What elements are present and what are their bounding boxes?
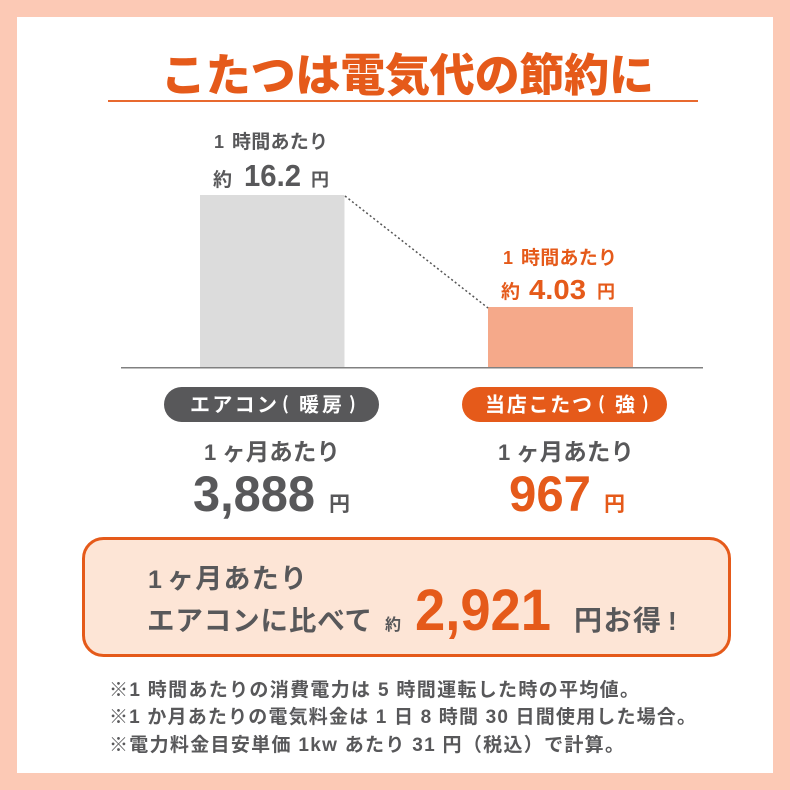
label: air conditioner hourly: 1	[214, 132, 224, 152]
pill label: kotatsu: 当店こたつ	[485, 394, 592, 416]
label: kotatsu hourly	[501, 247, 617, 305]
connector: dotted line between bars	[345, 196, 488, 308]
callout: savings: 2,921	[415, 578, 551, 643]
monthly cost: air conditioner: 3,888	[193, 466, 315, 522]
monthly cost: air conditioner: ヶ月あたり	[222, 439, 340, 465]
axis baseline	[121, 367, 703, 368]
label: air conditioner hourly: 時間あたり	[232, 131, 328, 153]
monthly cost: kotatsu: 1	[498, 440, 510, 465]
callout: savings: !	[668, 606, 677, 636]
monthly cost: kotatsu: ヶ月あたり	[516, 439, 634, 465]
monthly cost: air conditioner: 円	[329, 493, 350, 516]
footnotes	[109, 679, 696, 756]
pill label: kotatsu	[462, 387, 667, 422]
pill label: kotatsu: 強	[615, 394, 635, 416]
callout: savings: 円お得	[574, 605, 661, 636]
monthly cost: kotatsu	[498, 439, 634, 522]
footnotes: ※1 時間あたりの消費電力は 5 時間運転した時の平均値。	[109, 679, 639, 701]
label: air conditioner hourly: 円	[311, 170, 329, 190]
bar: kotatsu	[488, 307, 633, 368]
monthly cost: kotatsu: 円	[604, 493, 625, 516]
label: kotatsu hourly: 約	[501, 281, 520, 303]
label: kotatsu hourly: 1	[503, 248, 513, 268]
footnotes: ※1 か月あたりの電気料金は 1 日 8 時間 30 日間使用した場合。	[109, 706, 696, 728]
label: air conditioner hourly: 約	[213, 169, 232, 191]
pill label: air conditioner: エアコン	[190, 394, 277, 416]
callout: savings: 約	[385, 616, 401, 634]
pill label: kotatsu: (	[598, 390, 605, 416]
bar chart	[121, 131, 703, 368]
label: air conditioner hourly: 16.2	[244, 158, 301, 193]
pill label: air conditioner: (	[282, 390, 289, 416]
label: kotatsu hourly: 4.03	[529, 274, 586, 305]
callout: savings	[84, 538, 730, 656]
bar: air conditioner	[200, 195, 344, 368]
pill label: air conditioner: 暖房	[299, 394, 342, 416]
footnotes: ※電力料金目安単価 1kw あたり 31 円（税込）で計算。	[109, 733, 624, 756]
pill label: kotatsu: )	[642, 390, 649, 416]
title: こたつは電気代の節約に	[161, 39, 654, 104]
pill label: air conditioner	[164, 387, 379, 422]
label: kotatsu hourly: 時間あたり	[521, 247, 617, 269]
callout: savings: ヶ月あたり	[167, 564, 307, 594]
monthly cost: kotatsu: 967	[509, 466, 591, 522]
monthly cost: air conditioner: 1	[204, 440, 216, 465]
label: kotatsu hourly: 円	[597, 282, 615, 302]
callout: savings: エアコンに比べて	[147, 605, 372, 636]
pill label: air conditioner: )	[349, 390, 356, 416]
monthly cost: air conditioner	[193, 439, 350, 522]
label: air conditioner hourly	[213, 131, 329, 193]
callout: savings: 1	[148, 566, 162, 594]
